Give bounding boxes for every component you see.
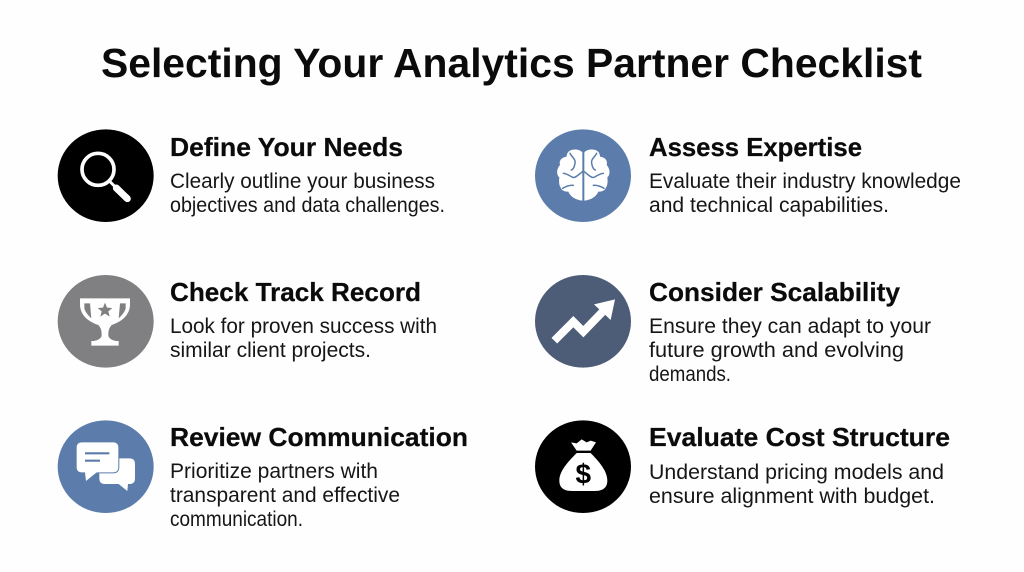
heading: Evaluate Cost Structure — [649, 422, 950, 452]
text block — [170, 315, 437, 362]
text block — [649, 315, 931, 386]
text block: Evaluate their industry knowledge — [649, 170, 961, 193]
text block: Prioritize partners with — [170, 460, 378, 483]
text block: Ensure they can adapt to your — [649, 315, 931, 338]
icon: growth arrow — [535, 275, 631, 368]
icon: chat bubbles — [58, 420, 154, 513]
icon: brain — [535, 129, 631, 222]
text block: Clearly outline your business — [170, 170, 435, 193]
text block: objectives and data challenges. — [170, 194, 445, 217]
text block: similar client projects. — [170, 339, 371, 362]
panel: evaluate cost structure — [535, 420, 950, 513]
heading: Review Communication — [170, 422, 468, 452]
panel: review communication — [58, 420, 468, 531]
text block: demands. — [649, 363, 731, 386]
heading: Define Your Needs — [170, 132, 403, 162]
title: Selecting Your Analytics Partner Checklist — [101, 40, 922, 86]
text block: transparent and effective — [170, 484, 400, 507]
text block: Understand pricing models and — [649, 461, 944, 484]
text block — [170, 460, 400, 531]
icon: trophy — [58, 275, 154, 368]
text block: communication. — [170, 508, 303, 531]
panel: check track record — [58, 275, 437, 368]
text block: ensure alignment with budget. — [649, 485, 935, 508]
text block: future growth and evolving — [649, 339, 904, 362]
panel: consider scalability — [535, 275, 931, 386]
icon: magnifying glass — [58, 129, 154, 222]
heading: Assess Expertise — [649, 132, 862, 162]
text block: Look for proven success with — [170, 315, 437, 338]
panel: define your needs — [58, 129, 445, 222]
panel: assess expertise — [535, 129, 961, 222]
icon: money bag — [535, 420, 631, 513]
icon: money bag: $ — [576, 458, 592, 489]
text block — [170, 170, 445, 217]
heading: Check Track Record — [170, 277, 421, 307]
text block: and technical capabilities. — [649, 194, 889, 217]
heading: Consider Scalability — [649, 277, 901, 307]
text block — [649, 461, 944, 508]
text block — [649, 170, 961, 217]
